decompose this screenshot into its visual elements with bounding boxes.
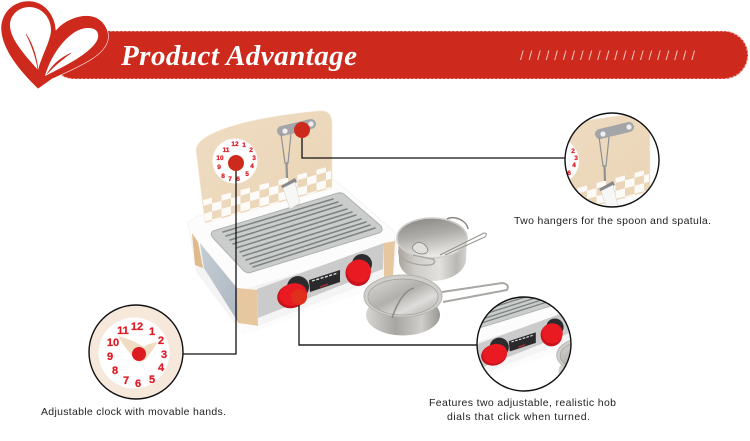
caption: hangers: Two hangers for the spoon and spatula. — [514, 215, 711, 227]
callout line: dials — [299, 305, 477, 345]
caption: clock: Adjustable clock with movable hands. — [41, 406, 226, 418]
backboard clock numbers — [216, 141, 256, 183]
clock numbers: 1 — [149, 326, 155, 338]
backboard clock numbers: 7 — [228, 176, 232, 183]
backboard clock numbers: 9 — [217, 164, 221, 171]
caption: dials: Features two adjustable, realistic hob — [429, 397, 616, 409]
decorative slashes: ///////////////////// — [520, 48, 695, 63]
inset: hangers — [564, 112, 660, 208]
toy illustration: hob, backboard, pot and pan — [188, 111, 508, 336]
clock numbers — [107, 321, 167, 390]
callout line: hangers — [302, 138, 565, 158]
clock numbers: 6 — [135, 378, 141, 390]
clock numbers: 9 — [107, 351, 113, 363]
clock numbers: 10 — [107, 337, 119, 349]
caption: dials — [429, 397, 616, 423]
inset: hob dials — [476, 296, 572, 392]
backboard clock numbers: 5 — [245, 171, 249, 178]
icon: heart logo — [1, 1, 108, 89]
clock numbers: 3 — [161, 349, 167, 361]
backboard clock numbers: 12 — [231, 141, 239, 148]
clock numbers: 7 — [123, 375, 129, 387]
marker: dial dot — [291, 289, 307, 305]
callout line: clock — [183, 170, 236, 354]
inset: hangers: 6 — [567, 170, 571, 177]
clock numbers: 12 — [131, 321, 143, 333]
backboard clock numbers: 1 — [242, 142, 246, 149]
backboard clock numbers: 10 — [216, 155, 224, 162]
marker: hanger dot — [294, 122, 310, 138]
backboard clock numbers: 2 — [249, 147, 253, 154]
title: Product Advantage — [120, 40, 357, 72]
backboard clock numbers: 8 — [221, 173, 225, 180]
marker: clock dot — [228, 155, 244, 171]
clock numbers: 4 — [158, 362, 165, 374]
inset: hangers: 3 — [574, 155, 578, 162]
backboard clock numbers: 6 — [236, 176, 240, 183]
inset: hangers: 2 — [571, 148, 575, 155]
clock numbers: 2 — [158, 335, 164, 347]
backboard clock numbers: 3 — [252, 155, 256, 162]
inset: clock — [89, 305, 183, 399]
clock hands — [118, 336, 157, 362]
inset: hangers: 4 — [572, 162, 576, 169]
caption: dials: dials that click when turned. — [447, 411, 590, 423]
backboard clock numbers: 11 — [223, 147, 230, 154]
header banner — [50, 31, 748, 79]
clock numbers: 5 — [149, 374, 155, 386]
backboard clock numbers: 4 — [250, 163, 254, 170]
clock numbers: 11 — [117, 325, 129, 337]
clock numbers: 8 — [112, 365, 118, 377]
